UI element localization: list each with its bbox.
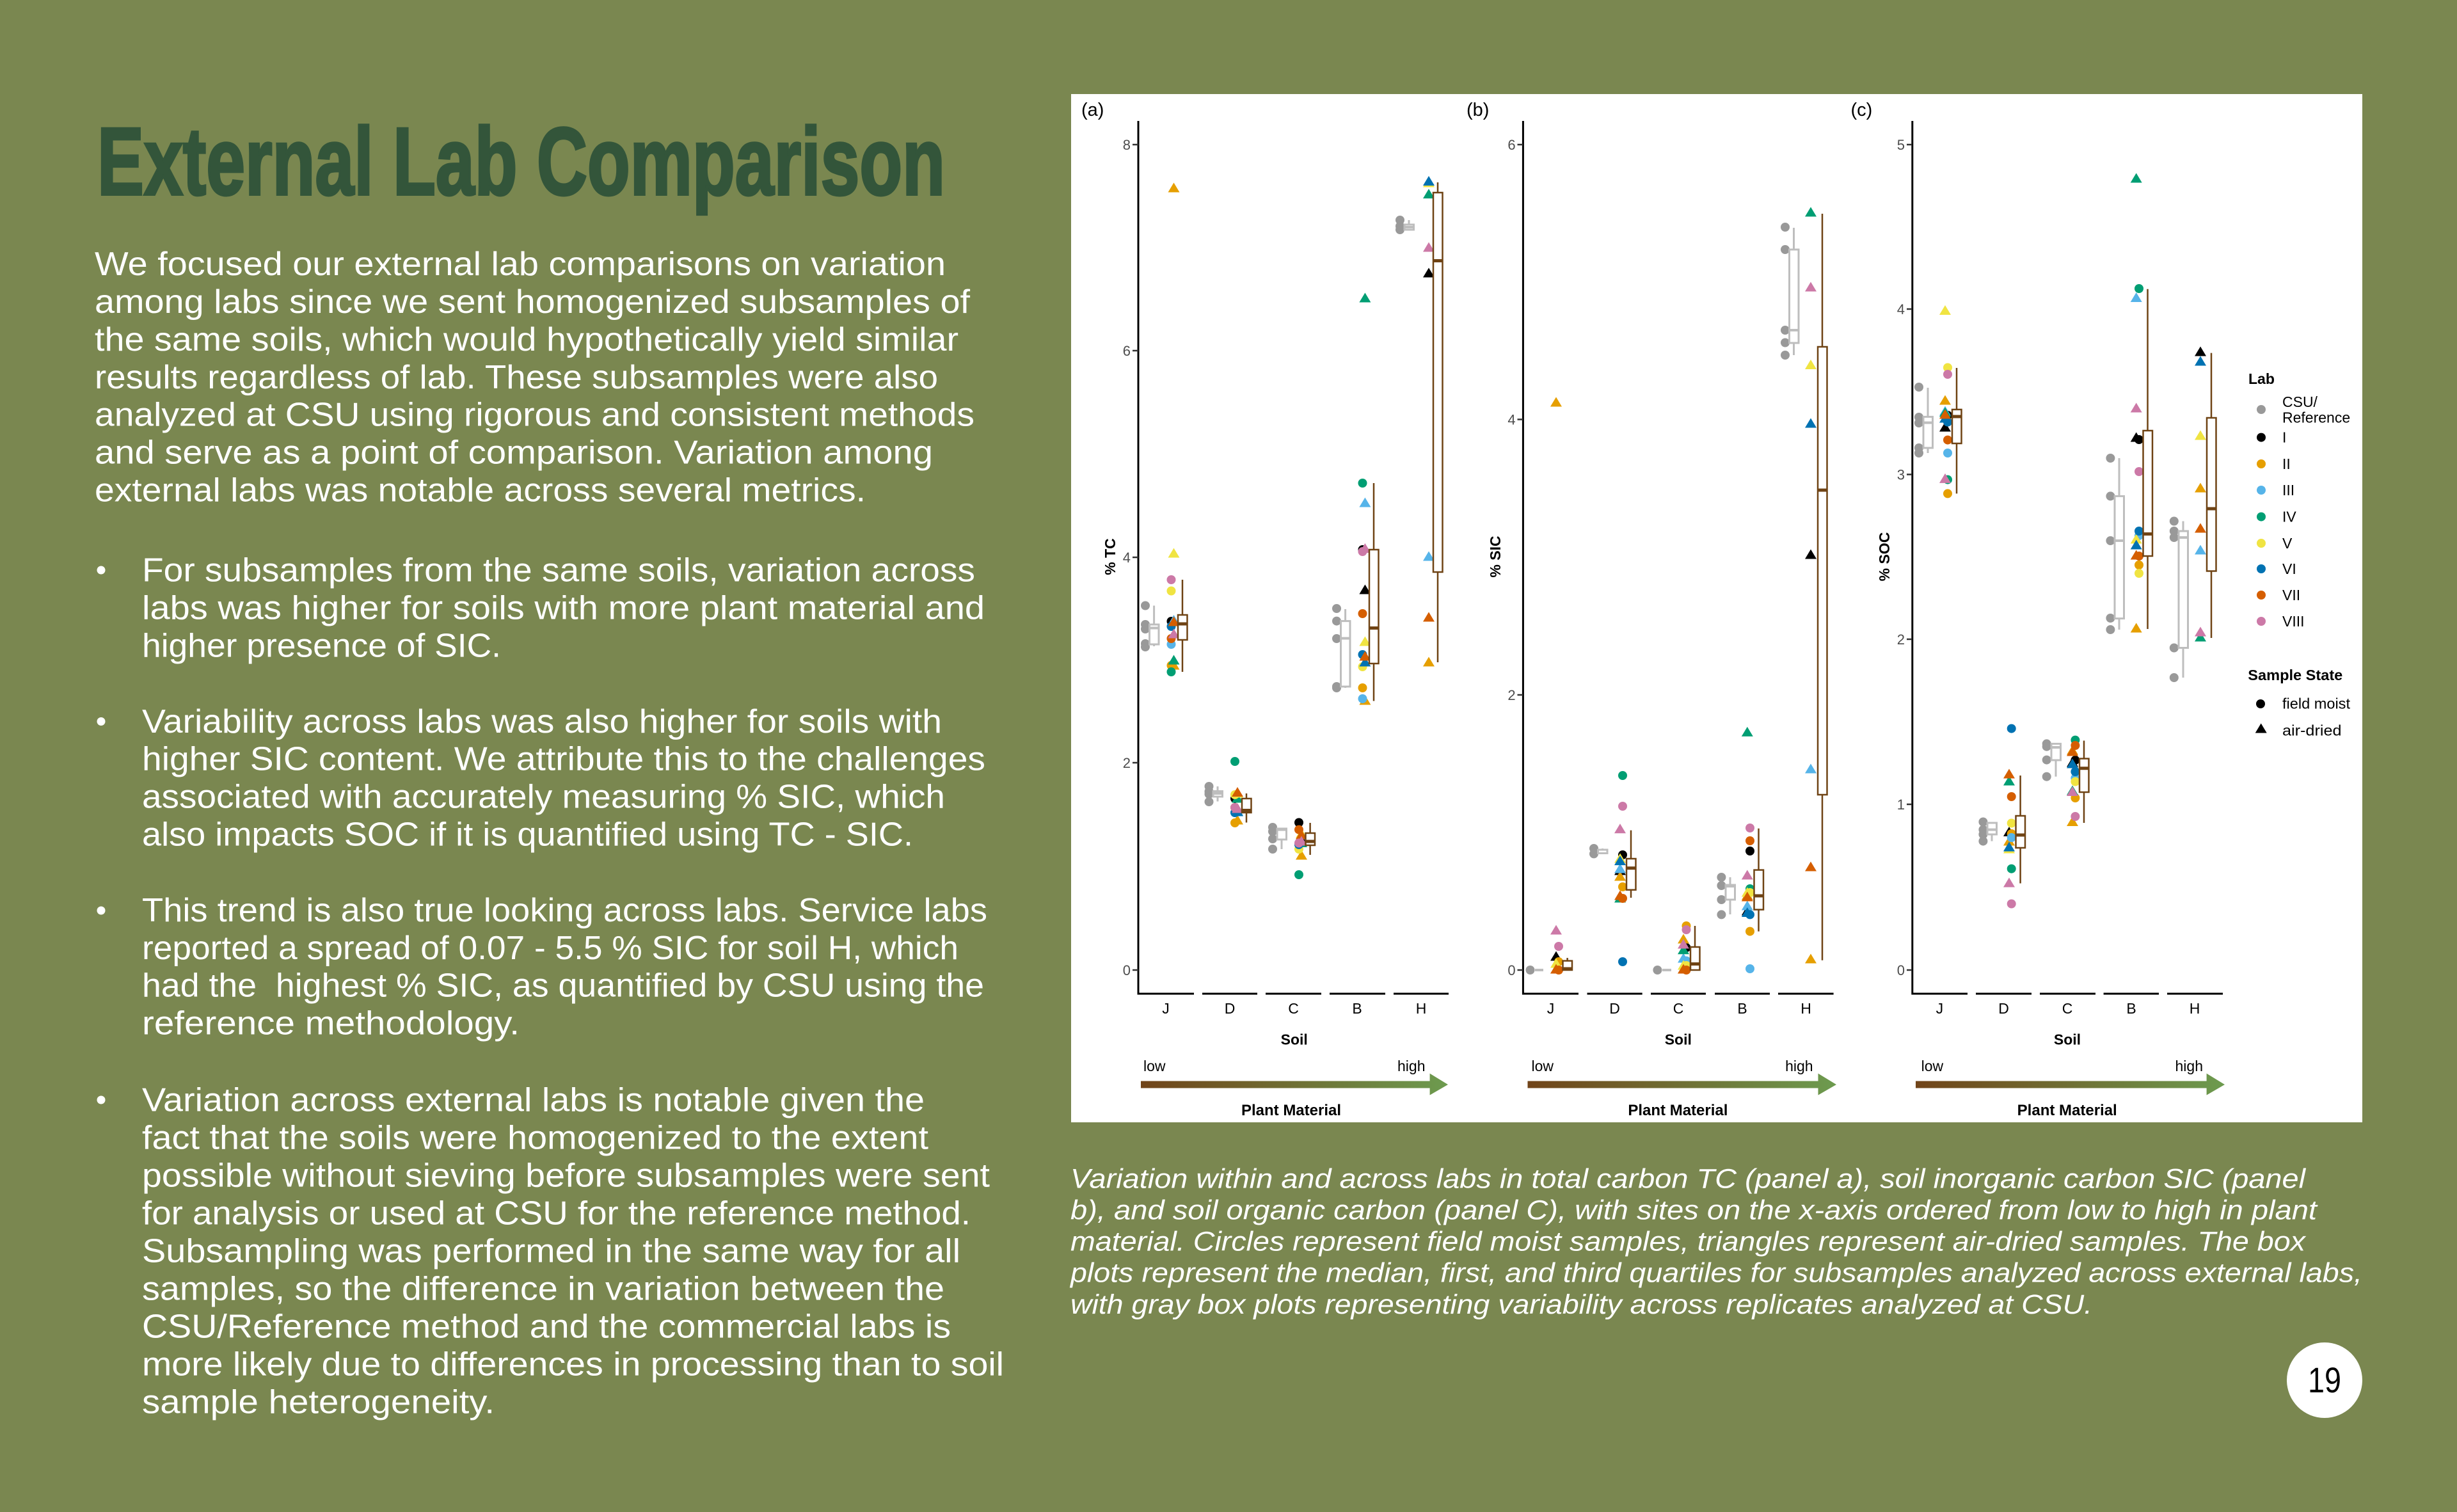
panel c: soil organic carbon: % SOC bbox=[1876, 532, 1893, 581]
panel b: soil inorganic carbon: 0 bbox=[1507, 962, 1516, 978]
panel b: soil inorganic carbon: 2 bbox=[1507, 687, 1516, 703]
legend: sample state bbox=[2248, 667, 2351, 738]
bullet: trend across labs bbox=[97, 892, 987, 1042]
points and boxes: soil D bbox=[1978, 724, 2025, 909]
panel c: soil organic carbon: H bbox=[2190, 1000, 2200, 1017]
legend: lab: Lab bbox=[2248, 370, 2275, 387]
panel b: soil inorganic carbon: 6 bbox=[1507, 137, 1516, 153]
bullet: homogenization and processing: CSU/Reference method and the commercial labs is bbox=[142, 1308, 951, 1345]
intro paragraph: external labs was notable across several metrics. bbox=[95, 472, 866, 509]
intro paragraph: and serve as a point of comparison. Variation among bbox=[95, 434, 933, 471]
bullet: homogenization and processing: more likely due to differences in processing than to soil bbox=[142, 1346, 1004, 1383]
panel a: total carbon: Soil bbox=[1281, 1031, 1308, 1048]
panel b: soil inorganic carbon bbox=[1467, 100, 1836, 1119]
title: External Lab Comparison bbox=[97, 107, 945, 215]
arrow: plant material a: Plant Material bbox=[1241, 1102, 1341, 1119]
arrow: plant material b bbox=[1528, 1058, 1836, 1119]
panel c: soil organic carbon: 3 bbox=[1897, 467, 1905, 482]
bullet: plant material and SIC bbox=[97, 552, 985, 664]
panel b: soil inorganic carbon: B bbox=[1737, 1000, 1747, 1017]
panel c: soil organic carbon: B bbox=[2126, 1000, 2136, 1017]
panel b: soil inorganic carbon: H bbox=[1801, 1000, 1811, 1017]
panel c: soil organic carbon: 1 bbox=[1897, 797, 1905, 813]
points and boxes: soil D bbox=[1204, 757, 1252, 827]
intro paragraph bbox=[95, 246, 974, 509]
panel c: soil organic carbon: 2 bbox=[1897, 632, 1905, 648]
panel a: total carbon: 8 bbox=[1123, 137, 1131, 153]
bullet: homogenization and processing: possible without sieving before subsamples were sent bbox=[142, 1157, 990, 1194]
panel c: soil organic carbon: (c) bbox=[1850, 100, 1872, 120]
panel a: total carbon: 4 bbox=[1123, 550, 1131, 566]
points and boxes: soil J bbox=[1914, 305, 1962, 498]
legend: sample state: field moist bbox=[2282, 696, 2351, 712]
legend: lab: III bbox=[2282, 482, 2294, 498]
bullet: SIC measuring challenges: higher SIC content. We attribute this to the challenges bbox=[142, 741, 985, 778]
panel b: soil inorganic carbon: Soil bbox=[1665, 1031, 1692, 1048]
intro paragraph: among labs since we sent homogenized subsamples of bbox=[95, 283, 971, 321]
bullet: trend across labs: This trend is also true looking across labs. Service labs bbox=[142, 892, 987, 929]
panel b: soil inorganic carbon: (b) bbox=[1467, 100, 1489, 120]
panel a: total carbon: B bbox=[1352, 1000, 1362, 1017]
panel c: soil organic carbon: J bbox=[1936, 1000, 1943, 1017]
bullet: trend across labs: had the highest % SIC, as quantified by CSU using the bbox=[142, 967, 984, 1005]
bullet: homogenization and processing: for analysis or used at CSU for the reference method. bbox=[142, 1195, 971, 1232]
intro paragraph: the same soils, which would hypothetically yield similar bbox=[95, 321, 958, 358]
panel a: total carbon: D bbox=[1225, 1000, 1235, 1017]
points and boxes: soil B bbox=[1332, 293, 1378, 705]
bullet: homogenization and processing: sample heterogeneity. bbox=[142, 1383, 495, 1420]
figure caption: Variation within and across labs in total carbon TC (panel a), soil inorganic carbon SIC (panel bbox=[1070, 1163, 2307, 1194]
arrow: plant material c: Plant Material bbox=[2017, 1102, 2117, 1119]
bullet: homogenization and processing: samples, so the difference in variation between the bbox=[142, 1271, 944, 1308]
arrow: plant material c: low bbox=[1921, 1058, 1944, 1074]
panel a: total carbon: J bbox=[1162, 1000, 1170, 1017]
intro paragraph: We focused our external lab comparisons on variation bbox=[95, 246, 946, 283]
panel c: soil organic carbon: 0 bbox=[1897, 962, 1905, 978]
arrow: plant material a: low bbox=[1143, 1058, 1166, 1074]
page number: 19 bbox=[2308, 1360, 2341, 1400]
page number bbox=[2287, 1342, 2362, 1418]
panel b: soil inorganic carbon: 4 bbox=[1507, 412, 1516, 427]
points and boxes: soil J bbox=[1141, 183, 1188, 676]
panel c: soil organic carbon: 4 bbox=[1897, 301, 1905, 317]
panel a: total carbon: 6 bbox=[1123, 343, 1131, 359]
figure caption: with gray box plots representing variability across replicates analyzed at CSU. bbox=[1070, 1289, 2092, 1320]
bullet: plant material and SIC: labs was higher for soils with more plant material and bbox=[142, 590, 985, 627]
panel a: total carbon: % TC bbox=[1102, 538, 1118, 575]
panel a: total carbon: C bbox=[1288, 1000, 1299, 1017]
panel c: soil organic carbon bbox=[1850, 100, 2225, 1119]
points and boxes: soil C bbox=[1268, 818, 1315, 879]
legend: lab: VIII bbox=[2282, 613, 2305, 630]
bullet: trend across labs: reported a spread of 0.07 - 5.5 % SIC for soil H, which bbox=[142, 930, 958, 967]
legend: sample state: air-dried bbox=[2282, 722, 2342, 738]
points and boxes: soil B bbox=[2106, 173, 2152, 634]
arrow: plant material b: low bbox=[1532, 1058, 1554, 1074]
bullet: SIC measuring challenges: associated with accurately measuring % SIC, which bbox=[142, 778, 945, 815]
bullet: homogenization and processing: Variation across external labs is notable given the bbox=[142, 1081, 925, 1118]
points and boxes: soil H bbox=[1395, 176, 1442, 667]
panel b: soil inorganic carbon: C bbox=[1673, 1000, 1683, 1017]
panel c: soil organic carbon: Soil bbox=[2054, 1031, 2081, 1048]
bullet: homogenization and processing: Subsampling was performed in the same way for all bbox=[142, 1232, 960, 1269]
arrow: plant material c bbox=[1916, 1058, 2225, 1119]
bullet: trend across labs: reference methodology. bbox=[142, 1005, 520, 1042]
intro paragraph: analyzed at CSU using rigorous and consistent methods bbox=[95, 397, 974, 434]
figure caption bbox=[1069, 1163, 2362, 1320]
points and boxes: soil C bbox=[1653, 921, 1699, 975]
panel a: total carbon: H bbox=[1416, 1000, 1426, 1017]
legend: lab: I bbox=[2282, 429, 2286, 446]
panel b: soil inorganic carbon: D bbox=[1609, 1000, 1620, 1017]
panel c: soil organic carbon: 5 bbox=[1897, 137, 1905, 153]
panel a: total carbon: (a) bbox=[1081, 100, 1104, 120]
points and boxes: soil C bbox=[2042, 736, 2088, 826]
panel a: total carbon bbox=[1081, 100, 1449, 1119]
legend: lab bbox=[2248, 370, 2350, 630]
points and boxes: soil D bbox=[1589, 771, 1635, 966]
points and boxes: soil H bbox=[1781, 207, 1827, 964]
figure caption: material. Circles represent field moist samples, triangles represent air-dried samples. The box bbox=[1070, 1226, 2307, 1257]
bullet: homogenization and processing bbox=[97, 1081, 1004, 1420]
figure caption: plots represent the median, first, and third quartiles for subsamples analyzed across external labs, bbox=[1069, 1258, 2362, 1289]
figure caption: b), and soil organic carbon (panel C), with sites on the x-axis ordered from low to high in plant bbox=[1070, 1195, 2318, 1226]
panel a: total carbon: 0 bbox=[1123, 962, 1131, 978]
points and boxes: soil H bbox=[2170, 347, 2216, 682]
legend: lab: CSU/ bbox=[2282, 394, 2318, 410]
legend: lab: Reference bbox=[2282, 410, 2350, 426]
arrow: plant material a bbox=[1141, 1058, 1448, 1119]
arrow: plant material b: Plant Material bbox=[1628, 1102, 1728, 1119]
panel c: soil organic carbon: C bbox=[2062, 1000, 2072, 1017]
bullet: homogenization and processing: fact that the soils were homogenized to the extent bbox=[142, 1120, 929, 1157]
legend: lab: V bbox=[2282, 535, 2293, 552]
bullet: SIC measuring challenges: also impacts SOC if it is quantified using TC - SIC. bbox=[142, 816, 913, 854]
legend: lab: VI bbox=[2282, 561, 2296, 577]
panel b: soil inorganic carbon: J bbox=[1547, 1000, 1554, 1017]
bullet: SIC measuring challenges: Variability across labs was also higher for soils with bbox=[142, 703, 942, 740]
panel a: total carbon: 2 bbox=[1123, 755, 1131, 771]
panel c: soil organic carbon: D bbox=[1998, 1000, 2009, 1017]
arrow: plant material a: high bbox=[1397, 1058, 1426, 1074]
points and boxes: soil J bbox=[1525, 397, 1572, 975]
arrow: plant material c: high bbox=[2175, 1058, 2203, 1074]
chart panel bbox=[1071, 94, 2362, 1122]
points and boxes: soil B bbox=[1717, 727, 1763, 973]
legend: lab: II bbox=[2282, 456, 2291, 472]
bullet: SIC measuring challenges bbox=[97, 703, 985, 854]
arrow: plant material b: high bbox=[1785, 1058, 1813, 1074]
legend: lab: VII bbox=[2282, 587, 2300, 603]
bullet: plant material and SIC: For subsamples from the same soils, variation across bbox=[142, 552, 975, 589]
intro paragraph: results regardless of lab. These subsamples were also bbox=[95, 359, 938, 396]
panel b: soil inorganic carbon: % SIC bbox=[1487, 536, 1504, 578]
bullet: plant material and SIC: higher presence of SIC. bbox=[142, 627, 501, 664]
legend: sample state: Sample State bbox=[2248, 667, 2342, 683]
legend: lab: IV bbox=[2282, 509, 2296, 525]
